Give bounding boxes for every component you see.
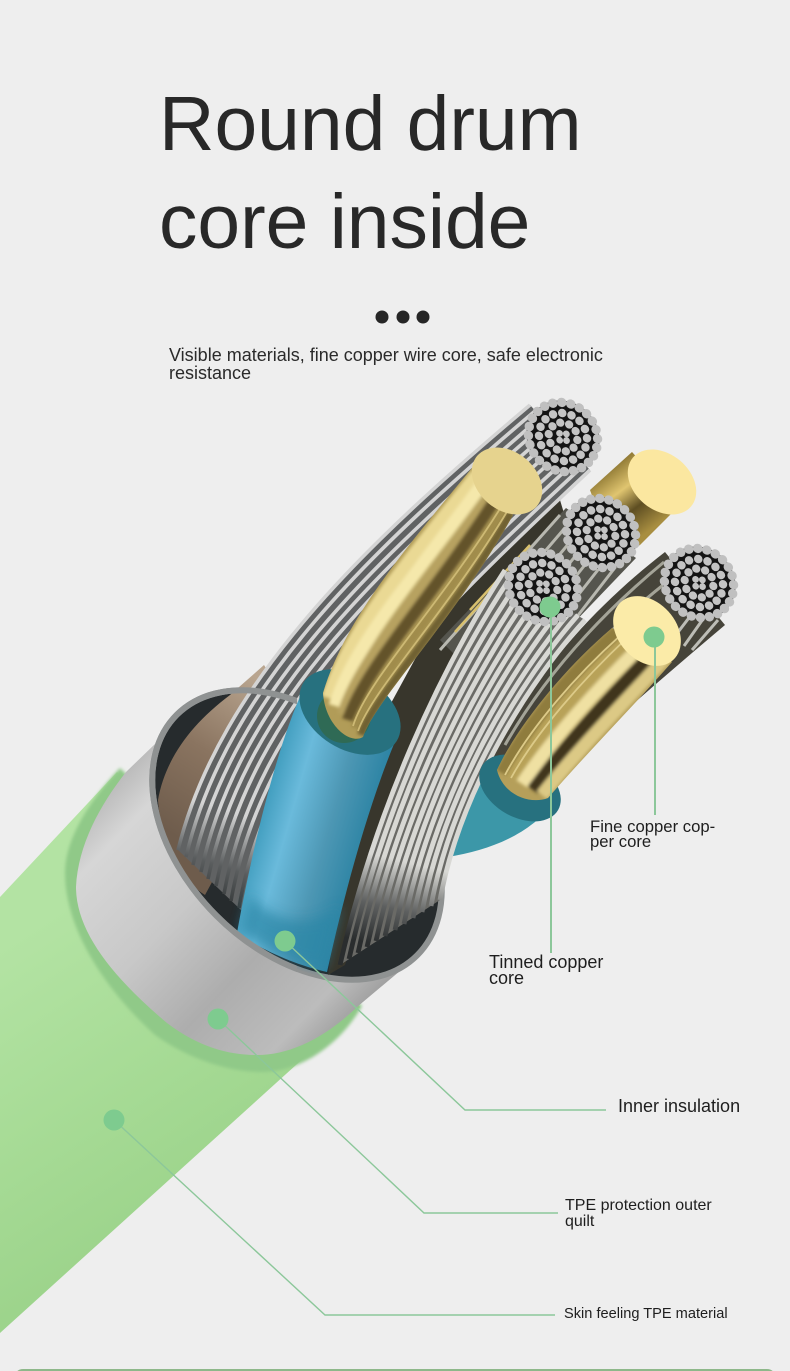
label: inner insulation: Inner insulation: [618, 1096, 740, 1116]
blue inner insulation: [235, 669, 401, 974]
strand cross-section centre: [562, 494, 640, 572]
near lip of silver ring: [149, 687, 297, 972]
centre tinned bundle, front: [340, 570, 585, 965]
label: skin feeling TPE: Skin feeling TPE material: [564, 1306, 728, 1322]
label: tinned copper core: Tinned copper: [489, 952, 603, 972]
rear blue insulation: [453, 784, 536, 856]
cable illustration: [0, 385, 751, 1333]
brown filler: [158, 665, 266, 895]
silver protection ring: [76, 634, 498, 1055]
bottom green band: [14, 1369, 776, 1371]
front gold wire: [323, 434, 556, 739]
label: TPE outer quilt: TPE protection outer: [565, 1197, 712, 1214]
strand cross-section right: [660, 544, 738, 622]
strand cross-section top: [524, 398, 602, 476]
right tinned bundle: [494, 552, 725, 757]
right gold wire: [497, 596, 681, 800]
label: fine copper core: Fine copper cop-: [590, 817, 715, 836]
subtitle: resistance: [169, 363, 251, 383]
dark core backing: [328, 500, 578, 975]
decorative three dots: [376, 310, 430, 324]
label: tinned copper core: core: [489, 968, 524, 988]
callout dots: [104, 596, 664, 1130]
teal ring of right wire: [479, 754, 561, 822]
rear gold wire: [590, 450, 696, 546]
green TPE cable body: [0, 772, 360, 1333]
left tinned bundle: [178, 405, 590, 930]
title: core inside: [159, 179, 530, 265]
title: Round drum: [159, 81, 582, 167]
strand cross-section lower: [504, 548, 582, 626]
leader lines: [114, 607, 655, 1315]
green collar: [65, 768, 362, 1072]
inner conductors: [158, 385, 751, 975]
label: fine copper core: per core: [590, 832, 651, 851]
subtitle: Visible materials, fine copper wire core, safe electronic: [169, 345, 603, 365]
label: TPE outer quilt: quilt: [565, 1213, 595, 1230]
centre tinned bundle: [439, 508, 636, 654]
